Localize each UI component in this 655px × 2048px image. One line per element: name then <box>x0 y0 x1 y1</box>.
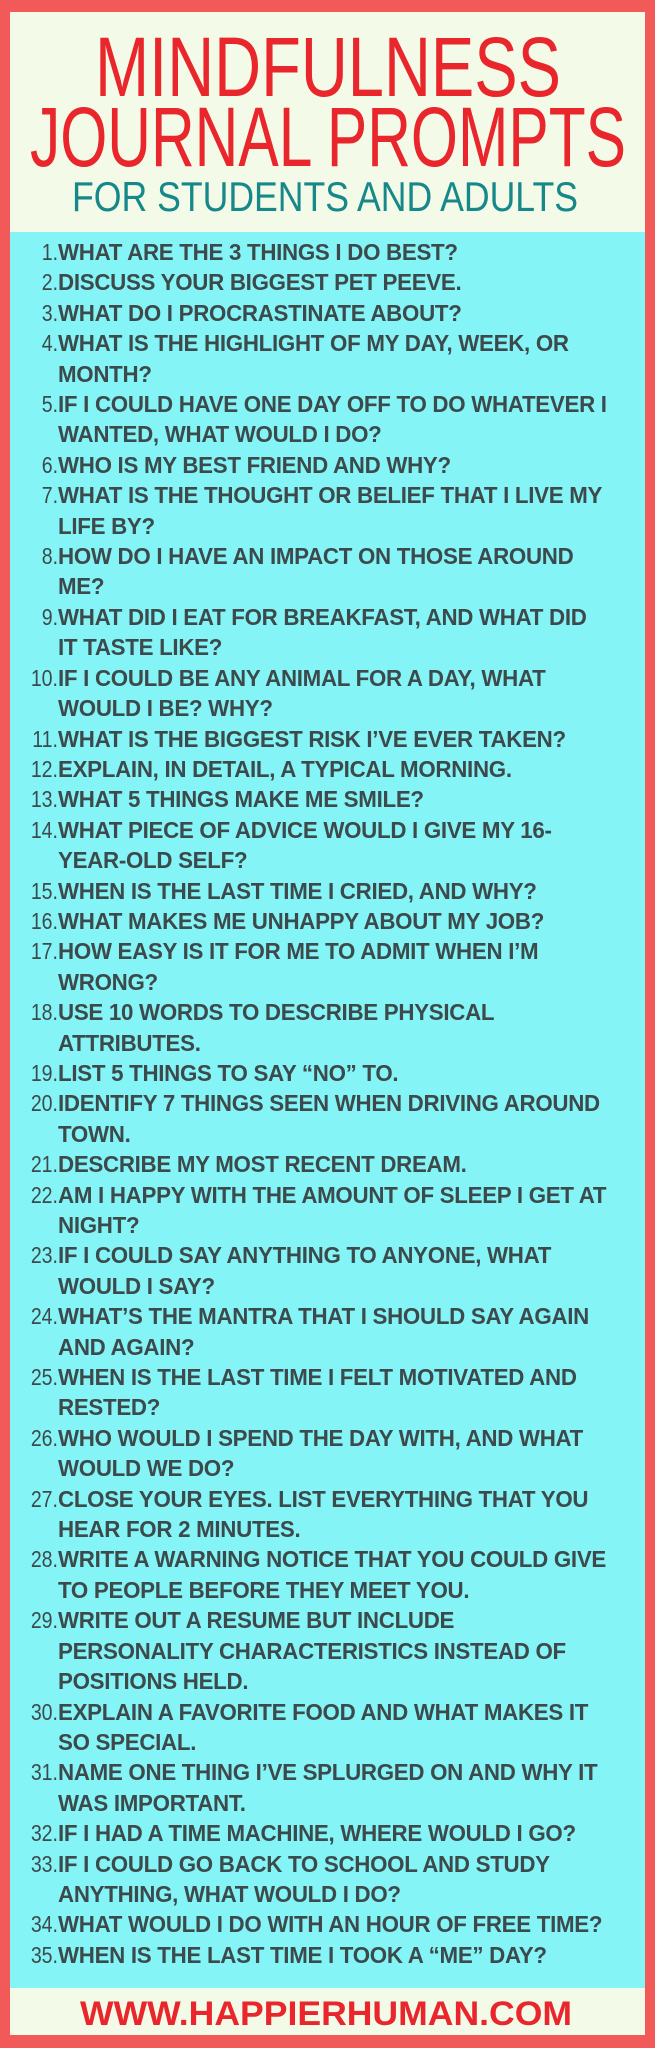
item 23 <box>31 1242 552 1299</box>
item 18: 18. <box>31 999 58 1025</box>
item 15: WHEN IS THE LAST TIME I CRIED, AND WHY? <box>58 878 537 904</box>
item 17 <box>31 938 538 995</box>
item 22 <box>31 1182 606 1238</box>
item 5 <box>42 391 607 447</box>
item 35: 35. <box>31 1942 58 1968</box>
item 25: WHEN IS THE LAST TIME I FELT MOTIVATED AND <box>58 1364 577 1390</box>
item 18: ATTRIBUTES. <box>58 1030 201 1056</box>
item 18: USE 10 WORDS TO DESCRIBE PHYSICAL <box>58 999 494 1025</box>
item 34: 34. <box>31 1911 58 1937</box>
item 30: EXPLAIN A FAVORITE FOOD AND WHAT MAKES IT <box>58 1698 588 1724</box>
item 7: WHAT IS THE THOUGHT OR BELIEF THAT I LIVE MY <box>58 482 602 508</box>
item 27: HEAR FOR 2 MINUTES. <box>58 1516 300 1542</box>
item 1: WHAT ARE THE 3 THINGS I DO BEST? <box>58 239 458 265</box>
item 30 <box>31 1698 588 1755</box>
item 33 <box>31 1851 550 1907</box>
item 16: WHAT MAKES ME UNHAPPY ABOUT MY JOB? <box>58 908 544 934</box>
item 19: 19. <box>31 1060 58 1086</box>
item 8: 8. <box>42 543 58 569</box>
item 28: 28. <box>31 1546 58 1572</box>
item 21: 21. <box>31 1151 58 1177</box>
item 22: AM I HAPPY WITH THE AMOUNT OF SLEEP I GET AT <box>58 1182 606 1208</box>
item 14 <box>31 817 552 873</box>
item 11: 11. <box>32 726 58 752</box>
item 5: WANTED, WHAT WOULD I DO? <box>58 421 381 447</box>
item 16: 16. <box>31 908 58 934</box>
item 26: WOULD WE DO? <box>58 1455 234 1481</box>
item 27: CLOSE YOUR EYES. LIST EVERYTHING THAT YOU <box>58 1486 588 1512</box>
item 25: RESTED? <box>58 1394 160 1420</box>
item 27: 27. <box>31 1486 58 1512</box>
item 5: 5. <box>42 391 58 417</box>
item 13: WHAT 5 THINGS MAKE ME SMILE? <box>58 786 424 812</box>
item 7: LIFE BY? <box>58 513 155 539</box>
item 23: WOULD I SAY? <box>58 1273 215 1299</box>
item 10: IF I COULD BE ANY ANIMAL FOR A DAY, WHAT <box>58 665 545 691</box>
item 4 <box>42 330 569 387</box>
item 10: 10. <box>31 665 58 691</box>
item 29: PERSONALITY CHARACTERISTICS INSTEAD OF <box>58 1638 566 1664</box>
title <box>30 20 626 220</box>
item 34: WHAT WOULD I DO WITH AN HOUR OF FREE TIME? <box>58 1911 602 1937</box>
item 17: 17. <box>31 938 58 964</box>
item 6: WHO IS MY BEST FRIEND AND WHY? <box>58 452 451 478</box>
item 29: WRITE OUT A RESUME BUT INCLUDE <box>58 1607 454 1633</box>
item 29: POSITIONS HELD. <box>58 1668 248 1694</box>
item 28: WRITE A WARNING NOTICE THAT YOU COULD GIVE <box>58 1546 606 1572</box>
item 9: IT TASTE LIKE? <box>58 634 222 660</box>
item 22: NIGHT? <box>58 1212 139 1238</box>
item 29: 29. <box>31 1607 58 1633</box>
item 26: WHO WOULD I SPEND THE DAY WITH, AND WHAT <box>58 1425 583 1451</box>
item 14: YEAR-OLD SELF? <box>58 847 247 873</box>
item 22: 22. <box>31 1182 58 1208</box>
item 20 <box>31 1090 600 1147</box>
item 33: 33. <box>31 1851 58 1877</box>
item 9: WHAT DID I EAT FOR BREAKFAST, AND WHAT DID <box>58 604 587 630</box>
item 9 <box>42 604 587 660</box>
item 31: NAME ONE THING I’VE SPLURGED ON AND WHY IT <box>58 1759 597 1785</box>
item 30: 30. <box>31 1698 58 1724</box>
item 4: 4. <box>42 330 58 356</box>
item 7: 7. <box>42 482 58 508</box>
item 27 <box>31 1486 588 1542</box>
item 2: 2. <box>42 269 58 295</box>
item 4: WHAT IS THE HIGHLIGHT OF MY DAY, WEEK, OR <box>58 330 569 356</box>
item 14: 14. <box>31 817 58 843</box>
item 4: MONTH? <box>58 361 152 387</box>
item 10: WOULD I BE? WHY? <box>58 695 273 721</box>
item 2: DISCUSS YOUR BIGGEST PET PEEVE. <box>58 269 461 295</box>
item 25 <box>31 1364 577 1420</box>
item 17: HOW EASY IS IT FOR ME TO ADMIT WHEN I’M <box>58 938 538 964</box>
item 24: 24. <box>31 1303 58 1329</box>
item 10 <box>31 665 546 721</box>
item 23: 23. <box>31 1242 58 1268</box>
item 12: 12. <box>31 756 58 782</box>
item 31: WAS IMPORTANT. <box>58 1790 246 1816</box>
item 30: SO SPECIAL. <box>58 1729 196 1755</box>
item 1: 1. <box>42 239 58 265</box>
item 20: 20. <box>31 1090 58 1116</box>
item 33: IF I COULD GO BACK TO SCHOOL AND STUDY <box>58 1851 550 1877</box>
item 9: 9. <box>42 604 58 630</box>
item 29 <box>31 1607 566 1694</box>
item 35: WHEN IS THE LAST TIME I TOOK A “ME” DAY? <box>58 1942 547 1968</box>
item 24: WHAT’S THE MANTRA THAT I SHOULD SAY AGAIN <box>58 1303 589 1329</box>
item 31: 31. <box>31 1759 58 1785</box>
item 32: 32. <box>31 1820 58 1846</box>
item 3: WHAT DO I PROCRASTINATE ABOUT? <box>58 300 462 326</box>
item 28 <box>31 1546 606 1603</box>
item 31 <box>31 1759 598 1816</box>
item 5: IF I COULD HAVE ONE DAY OFF TO DO WHATEVER I <box>58 391 607 417</box>
item 13: 13. <box>31 786 58 812</box>
item 20: IDENTIFY 7 THINGS SEEN WHEN DRIVING AROUND <box>58 1090 600 1116</box>
item 12: EXPLAIN, IN DETAIL, A TYPICAL MORNING. <box>58 756 512 782</box>
item 26: 26. <box>31 1425 58 1451</box>
item 24 <box>31 1303 589 1360</box>
item 8 <box>42 543 573 599</box>
item 20: TOWN. <box>58 1121 130 1147</box>
footer url: WWW.HAPPIERHUMAN.COM <box>80 1995 572 2033</box>
item 19: LIST 5 THINGS TO SAY “NO” TO. <box>58 1060 398 1086</box>
item 26 <box>31 1425 583 1481</box>
item 33: ANYTHING, WHAT WOULD I DO? <box>58 1881 401 1907</box>
item 11: WHAT IS THE BIGGEST RISK I’VE EVER TAKEN? <box>58 726 566 752</box>
item 28: TO PEOPLE BEFORE THEY MEET YOU. <box>58 1577 469 1603</box>
item 8: HOW DO I HAVE AN IMPACT ON THOSE AROUND <box>58 543 573 569</box>
item 18 <box>31 999 494 1056</box>
item 15: 15. <box>31 878 58 904</box>
item 21: DESCRIBE MY MOST RECENT DREAM. <box>58 1151 467 1177</box>
item 14: WHAT PIECE OF ADVICE WOULD I GIVE MY 16- <box>58 817 552 843</box>
item 32: IF I HAD A TIME MACHINE, WHERE WOULD I GO? <box>58 1820 576 1846</box>
item 6: 6. <box>42 452 58 478</box>
item 7 <box>42 482 602 539</box>
item 8: ME? <box>58 573 104 599</box>
item 23: IF I COULD SAY ANYTHING TO ANYONE, WHAT <box>58 1242 551 1268</box>
item 24: AND AGAIN? <box>58 1334 194 1360</box>
item 17: WRONG? <box>58 969 158 995</box>
item 25: 25. <box>31 1364 58 1390</box>
item 3: 3. <box>42 300 58 326</box>
